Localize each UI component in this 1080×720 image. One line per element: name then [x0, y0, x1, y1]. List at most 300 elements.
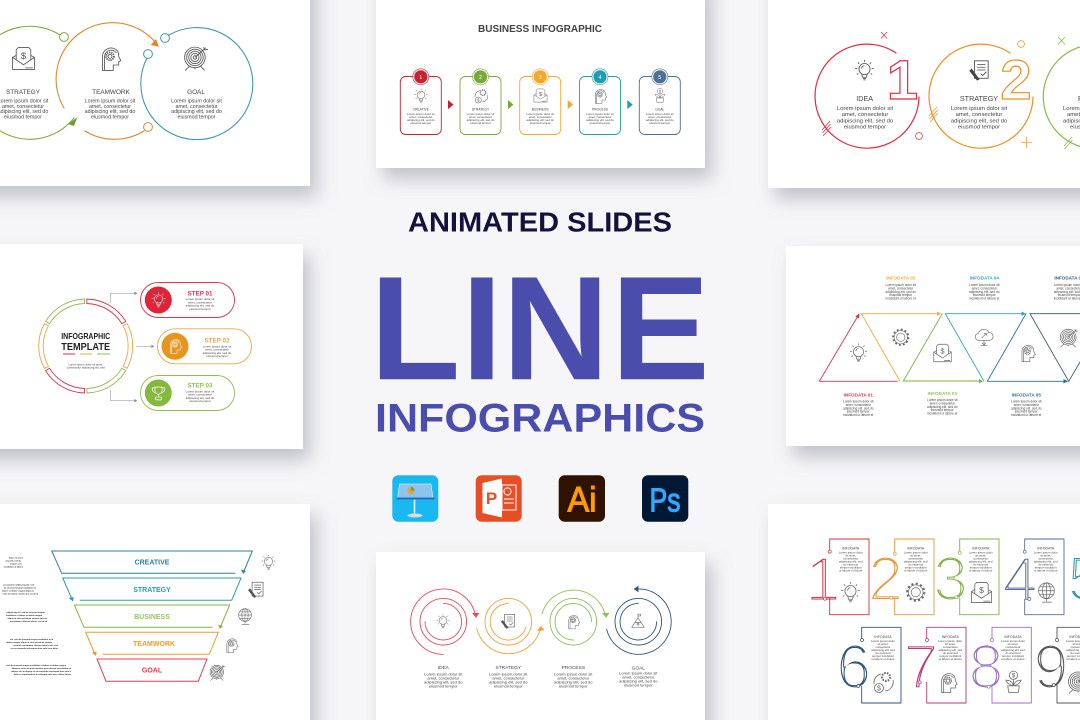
- number card 7: INFODATA: [942, 635, 960, 639]
- panel: numbered circles slide: [768, 0, 1080, 188]
- text: strategy: [489, 665, 528, 688]
- text: infodata 05: Lorem ipsum dolor sit: [1011, 400, 1042, 404]
- icon: envelope: [934, 344, 951, 362]
- card 1 creative: [400, 69, 441, 134]
- card 1 creative: Lorem ipsum dolor sit: [407, 112, 435, 116]
- funnel tier business: BUSINESS: [134, 614, 170, 621]
- text: process: [554, 665, 593, 688]
- card 1 creative: adipiscing elit, sed do: [407, 118, 435, 122]
- orange arc with arrow: [56, 23, 159, 139]
- text: infodata 01: eiusmod tempor: [847, 410, 871, 414]
- text: teamwork: adipiscing elit, sed do: [85, 109, 135, 115]
- number card 6: do eiusmod: [876, 651, 891, 655]
- left text blocks: dolor sit amet,: [9, 556, 23, 560]
- number card 6: INFODATA: [874, 635, 892, 639]
- left text blocks: laboris nisi ut aliquip ex ea commodo consequat duis aute ir: [11, 670, 71, 673]
- number card 1: INFODATA: [842, 546, 860, 550]
- funnel tier goal: [97, 659, 207, 681]
- left text blocks: sed do eiusmod tempor incididunt ut labore et dolore magna: [6, 664, 67, 667]
- text: goal: eiusmod tempor: [178, 114, 216, 120]
- card 5 goal: 5: [658, 75, 661, 81]
- number card 3: sit amet,: [975, 554, 986, 558]
- text: infodata 04: adipiscing elit, sed do: [969, 290, 1000, 294]
- icon: document: [501, 614, 515, 628]
- text: infodata 04: INFODATA 04: [970, 276, 999, 280]
- pill: step 02: eiusmod tempor: [206, 354, 228, 358]
- text: goal: amet, consectetur: [622, 674, 655, 680]
- text: infodata 01: adipiscing elit, sed do: [843, 406, 874, 410]
- number card 4: tempor incididunt: [1035, 566, 1057, 570]
- number card 7: tempor incididunt: [939, 654, 962, 658]
- number card 8: do eiusmod: [1006, 651, 1021, 655]
- number card 3: tempor incididunt: [970, 566, 992, 570]
- triangle 2 orange: [861, 314, 938, 381]
- pill: step 03: adipiscing elit, sed do: [186, 396, 215, 400]
- text: strategy: adipiscing elit, sed do: [951, 118, 1008, 124]
- title: line: LINE: [370, 246, 710, 411]
- card 4 process: [580, 69, 620, 134]
- number card 1: 1: [806, 546, 840, 614]
- number card 6: ut labore et dolore: [871, 657, 895, 661]
- arrow 2: [508, 100, 513, 109]
- number card 7: [904, 627, 966, 703]
- number card 1: Lorem ipsum dolor: [839, 550, 863, 554]
- number card 6: consectetur: [876, 645, 891, 649]
- pill: step 01: [140, 282, 234, 318]
- text: goal: adipiscing elit, sed do: [171, 109, 222, 115]
- text: infodata 02: Lorem ipsum dolor sit: [885, 283, 916, 287]
- card 3 business: amet, consectetur: [529, 115, 552, 119]
- center title: Lorem ipsum dolor sit amet,: [68, 363, 103, 367]
- text: teamwork: amet, consectetur: [89, 104, 131, 110]
- card 4 process: amet, consectetur: [589, 115, 612, 119]
- number card 2: 2: [868, 545, 903, 614]
- center title: consectetur adipiscing elit, sed: [67, 366, 105, 370]
- text: goal: GOAL: [632, 666, 645, 672]
- number card 3: ut labore et dolore: [969, 568, 993, 572]
- number card 2: Lorem ipsum dolor: [904, 550, 928, 554]
- number card 3: [933, 539, 999, 615]
- card 4 process: PROCESS: [592, 108, 609, 112]
- number card 8: INFODATA: [1004, 635, 1022, 639]
- spiral blue: [607, 586, 671, 654]
- icon: cloud: [975, 329, 993, 346]
- connector arrows: [110, 292, 154, 402]
- number card 8: Lorem ipsum dolor: [1001, 639, 1025, 643]
- number card 1: sit amet,: [845, 554, 856, 558]
- number card 2: sit amet,: [910, 554, 921, 558]
- number card 8: ut labore et dolore: [1001, 657, 1025, 661]
- text: idea: Lorem ipsum dolor sit: [837, 106, 894, 112]
- left text blocks: [2, 556, 72, 676]
- text: strategy: adipiscing elit, sed do: [489, 679, 528, 684]
- text: teamwork: [85, 89, 136, 120]
- number card 7: Lorem ipsum dolor: [938, 639, 962, 643]
- text: infodata 01: INFODATA 01: [844, 393, 873, 398]
- left text blocks: incididunt ut labore et dolore magna: [6, 614, 43, 617]
- number card 3: adipiscing elit, sed: [969, 560, 993, 564]
- text: strategy: [0, 89, 49, 120]
- left text blocks: dolor in reprehenderit in voluptate velit esse cillum dolore: [14, 673, 72, 676]
- text: infodata 05: INFODATA 05: [1012, 393, 1041, 398]
- card 2 strategy: eiusmod tempor: [470, 121, 491, 125]
- text: infodata 02: adipiscing elit, sed do: [885, 290, 916, 294]
- funnel tier strategy: [63, 578, 241, 602]
- text: idea: [424, 665, 463, 688]
- triangle arrowheads: [855, 312, 1068, 384]
- left text blocks: enim ad minim veniam quis nostrud: [3, 592, 39, 596]
- pill: step 03: Lorem ipsum dolor sit: [186, 389, 214, 393]
- text: infodata 05: incididunt ut labore et: [1011, 413, 1042, 417]
- center title: TEMPLATE: [61, 342, 110, 353]
- text: infodata 01: amet, consectetur: [846, 403, 872, 407]
- number card 6: [837, 627, 901, 703]
- icon: globe: [239, 609, 251, 624]
- icon: powerpoint: P: [486, 489, 497, 508]
- green arc with arrow: [0, 26, 77, 139]
- icon: illustrator: [559, 475, 605, 522]
- icon: keynote: [392, 475, 438, 522]
- icon: head: [1022, 345, 1035, 362]
- text: strategy: eiusmod tempor: [494, 683, 523, 688]
- number card 4: [1003, 539, 1064, 615]
- panel: circular strategy teamwork goal slide: [0, 0, 310, 186]
- pill: step 02: amet, consectetur: [205, 348, 229, 352]
- text: strategy: eiusmod tempor: [4, 114, 42, 120]
- text: goal: GOAL: [187, 89, 205, 96]
- card 2 strategy: Lorem ipsum dolor sit: [467, 112, 495, 116]
- number card 8: 8: [969, 633, 1003, 702]
- text: strategy: Lorem ipsum dolor sit: [489, 671, 528, 676]
- text: goal: eiusmod tempor: [624, 682, 653, 688]
- number card 1: ut labore et dolore: [839, 568, 863, 572]
- text: infodata 03: incididunt ut labore et: [927, 412, 958, 416]
- text: infodata 05: adipiscing elit, sed do: [1011, 406, 1042, 410]
- card 3 business: eiusmod tempor: [530, 121, 551, 125]
- panel: spiral circles slide: [376, 552, 705, 720]
- number card 9: [1034, 627, 1080, 703]
- text: idea: amet, consectetur: [427, 675, 460, 680]
- card 5 goal: GOAL: [655, 108, 665, 112]
- panel: big numbers slide: [768, 504, 1080, 720]
- card 5 goal: eiusmod tempor: [649, 121, 670, 125]
- triangle 3 green: [903, 314, 980, 381]
- number card 7: 7: [904, 633, 938, 702]
- left text blocks: do eiusmod tempor incididunt ut: [4, 586, 36, 590]
- red circle 1: 1: [887, 48, 918, 111]
- icon: strategy document: [970, 61, 988, 80]
- text: infodata 03: Lorem ipsum dolor sit: [927, 398, 958, 402]
- left text blocks: elit, sed do eiusmod tempor incididunt ut la: [10, 638, 54, 641]
- heading: BUSINESS INFOGRAPHIC: [478, 23, 602, 35]
- text: infodata 04: incididunt ut labore et: [969, 297, 1000, 301]
- card 2 strategy: adipiscing elit, sed do: [467, 118, 495, 122]
- arrow 4: [627, 100, 633, 109]
- card 3 business: BUSINESS: [532, 108, 549, 112]
- number card 4: Lorem ipsum dolor: [1034, 550, 1058, 554]
- text: idea: adipiscing elit, sed do: [837, 118, 894, 124]
- card 3 business: 3: [539, 75, 542, 81]
- left text blocks: exercitation ullamco laboris nisi ut ali: [10, 620, 47, 623]
- text: infodata 02: amet, consectetur: [888, 286, 914, 290]
- text: goal: Lorem ipsum dolor sit: [171, 98, 222, 104]
- text: infodata 02: incididunt ut labore et: [886, 297, 916, 301]
- text: strategy: Lorem ipsum dolor sit: [951, 106, 1008, 112]
- text: process: adipiscing elit, sed do: [554, 679, 593, 684]
- card 1 creative: eiusmod tempor: [410, 121, 431, 125]
- number card 9: 9: [1034, 633, 1068, 702]
- text: goal: [619, 666, 658, 688]
- card 4 process: 4: [598, 75, 602, 81]
- pill: step 01: adipiscing elit, sed do: [186, 304, 215, 308]
- number card 8: adipiscing elit, sed: [1001, 648, 1025, 652]
- card 2 strategy: amet, consectetur: [469, 115, 492, 119]
- pill: step 02: Lorem ipsum dolor sit: [203, 344, 232, 348]
- icon: envelope: [13, 48, 34, 69]
- panel: funnel slide: [0, 504, 310, 720]
- number card 3: INFODATA: [972, 546, 990, 550]
- text: infodata 04: Lorem ipsum dolor sit: [969, 283, 1000, 287]
- arrow 1: [448, 100, 453, 109]
- icon: illustrator: Ai: [568, 480, 596, 520]
- text: idea: IDEA: [856, 94, 873, 103]
- text: process: Lorem ipsum dolor sit: [554, 671, 593, 676]
- left text blocks: cing elit, sed do: [5, 560, 22, 562]
- panel: business infographic slide: [376, 0, 705, 168]
- card 5 goal: adipiscing elit, sed do: [646, 118, 674, 122]
- card 1 creative: amet, consectetur: [409, 115, 432, 119]
- funnel tier creative: [52, 551, 252, 574]
- card 3 business: adipiscing elit, sed do: [526, 118, 554, 122]
- pill: step 03: amet, consectetur: [188, 393, 212, 397]
- text: infodata 03: INFODATA 03: [928, 391, 957, 396]
- left text blocks: aliqua ut enim ad minim veniam quis nostrud exercitation ul: [12, 667, 71, 670]
- pill: step 03: eiusmod tempor: [189, 399, 211, 403]
- text: idea: adipiscing elit, sed do: [424, 679, 463, 684]
- pill: step 02: adipiscing elit, sed do: [203, 351, 232, 355]
- text: teamwork: TEAMWORK: [92, 89, 131, 96]
- pill: step 01: Lorem ipsum dolor sit: [186, 297, 214, 301]
- left text blocks: adipiscing elit, sed do eiusmod tempor: [7, 611, 45, 614]
- text: process: eiusmod tempor: [559, 683, 588, 688]
- number card 7: adipiscing elit, sed: [938, 648, 963, 652]
- number card 8: consectetur: [1006, 645, 1021, 649]
- number card 6: Lorem ipsum dolor: [871, 639, 895, 643]
- left text blocks: tempor ut et: [10, 562, 22, 566]
- number card 6: sit amet,: [878, 642, 889, 646]
- left text blocks: nostrud exercitation ullamco laboris nisi ut al: [13, 644, 58, 647]
- center title: INFOGRAPHIC: [61, 331, 110, 341]
- icon: powerpoint: [476, 475, 522, 522]
- number card 2: do eiusmod: [908, 562, 924, 566]
- card 4 process: adipiscing elit, sed do: [586, 118, 614, 122]
- pill: step 01: STEP 01: [187, 290, 213, 297]
- card 3 business: Lorem ipsum dolor sit: [526, 112, 554, 116]
- text: infodata 04: eiusmod tempor: [973, 293, 997, 297]
- text: infodata 02: eiusmod tempor: [889, 293, 913, 297]
- card 5 goal: [639, 69, 680, 134]
- number card 1: [806, 539, 869, 615]
- text: strategy: [951, 94, 1008, 131]
- card 4 process: eiusmod tempor: [590, 121, 610, 125]
- left text blocks: dolore magna aliqua ut enim ad minim veniam: [6, 641, 52, 644]
- icon: bulb: [436, 614, 450, 628]
- pill: step 01: amet, consectetur: [188, 300, 212, 304]
- text: infodata 01: incididunt ut labore et: [843, 413, 874, 417]
- icon: target: [1060, 329, 1078, 347]
- left text blocks: ex ea commodo consequat duis aute irure dolor: [11, 647, 58, 650]
- title: animated slides: ANIMATED SLIDES: [408, 207, 672, 238]
- text: idea: eiusmod tempor: [844, 125, 886, 131]
- text: strategy: STRATEGY: [960, 94, 998, 103]
- number card 1: consectetur: [843, 556, 858, 560]
- number card 3: do eiusmod: [973, 562, 989, 566]
- number card 8: [969, 627, 1031, 703]
- panel: triangles timeline slide: [786, 246, 1080, 446]
- text: infodata 06: eiusmod tempor: [1058, 293, 1080, 297]
- text: strategy: eiusmod tempor: [958, 125, 1000, 131]
- number card 8: sit amet,: [1008, 642, 1019, 646]
- text: goal: amet, consectetur: [175, 104, 218, 110]
- icon: bulb: [262, 555, 275, 569]
- number card 2: tempor incididunt: [905, 566, 927, 570]
- number card 3: consectetur: [973, 556, 988, 560]
- text: idea: IDEA: [438, 665, 450, 671]
- card 5 goal: Lorem ipsum dolor sit: [646, 112, 674, 116]
- pill: step 01: eiusmod tempor: [189, 307, 211, 311]
- triangle 5 blue: [987, 314, 1065, 381]
- text: infodata 01: Lorem ipsum dolor sit: [843, 400, 874, 404]
- text: infodata 04: [969, 276, 1000, 301]
- icon: target: [210, 665, 225, 681]
- funnel tier goal: GOAL: [142, 668, 163, 675]
- arrow 3: [568, 100, 573, 109]
- card 2 strategy: 2: [479, 75, 482, 81]
- pill: step 02: [158, 329, 252, 364]
- teal circle: [141, 28, 253, 140]
- funnel tier business: [74, 605, 230, 629]
- left text blocks: incididunt ut labore: [4, 566, 24, 568]
- title: infographics: INFOGRAPHICS: [375, 397, 705, 441]
- icon: photoshop: [642, 475, 688, 522]
- number card 2: INFODATA: [907, 546, 925, 550]
- text: strategy: amet, consectetur: [956, 112, 1002, 118]
- funnel tier creative: CREATIVE: [135, 560, 170, 567]
- number card 2: [868, 539, 934, 615]
- number card 2: ut labore et dolore: [904, 568, 928, 572]
- number card 4: adipiscing elit, sed: [1034, 560, 1058, 564]
- number card 4: consectetur: [1038, 556, 1053, 560]
- card 3 business: [520, 69, 561, 134]
- number card 6: 6: [837, 633, 871, 702]
- icon: document: [248, 582, 263, 598]
- text: infodata 05: eiusmod tempor: [1015, 410, 1039, 414]
- number card 3: 3: [933, 545, 968, 614]
- card 2 strategy: [460, 69, 501, 134]
- icon: head: [569, 615, 580, 629]
- text: teamwork: Lorem ipsum dolor sit: [85, 98, 136, 104]
- number card 8: tempor incididunt: [1002, 654, 1024, 658]
- text: infodata 03: eiusmod tempor: [931, 408, 955, 412]
- text: process: [1063, 94, 1080, 131]
- triangle 4 teal: [945, 314, 1023, 381]
- icon: gear: [893, 330, 908, 345]
- text: strategy: amet, consectetur: [492, 675, 525, 680]
- text: infodata 03: amet, consectetur: [930, 401, 956, 405]
- card 2 strategy: STRATEGY: [472, 108, 490, 112]
- icon: bulb: [850, 343, 867, 362]
- card 1 creative: 1: [419, 75, 422, 81]
- triangle 6 dark: [1030, 314, 1080, 381]
- pill: step 02: STEP 02: [204, 338, 230, 345]
- text: idea: Lorem ipsum dolor sit: [424, 671, 463, 676]
- number card 2: adipiscing elit, sed: [904, 560, 928, 564]
- text: process: PROCESS: [562, 665, 585, 671]
- icon: head: [227, 639, 238, 653]
- center title: [61, 331, 110, 370]
- text: infodata 02: INFODATA 02: [886, 276, 916, 280]
- number card 1: adipiscing elit, sed: [839, 560, 863, 564]
- funnel tier teamwork: TEAMWORK: [133, 641, 175, 648]
- number card 4: 4: [1003, 546, 1037, 614]
- card 1 creative: CREATIVE: [413, 108, 430, 112]
- text: process: amet, consectetur: [557, 675, 590, 680]
- left text blocks: aliqua ut enim ad minim veniam quis no: [8, 617, 48, 620]
- text: infodata 01: [843, 393, 874, 417]
- number card 2: consectetur: [908, 556, 923, 560]
- text: infodata 05: amet, consectetur: [1014, 403, 1040, 407]
- spiral orange: [477, 598, 544, 654]
- number card 6: adipiscing elit, sed: [871, 648, 895, 652]
- text: idea: amet, consectetur: [842, 112, 888, 118]
- number card 1: tempor incididunt: [840, 566, 862, 570]
- spiral red: [411, 589, 478, 654]
- icon: flag triangle: [632, 614, 644, 627]
- pill: step 03: [140, 376, 234, 410]
- text: teamwork: eiusmod tempor: [91, 114, 129, 120]
- spiral green: [542, 590, 608, 645]
- number card 7: ut labore et dolore: [939, 657, 962, 661]
- icon: photoshop: Ps: [650, 483, 680, 520]
- card 4 process: Lorem ipsum dolor sit: [586, 112, 614, 116]
- text: goal: [171, 89, 222, 120]
- triangle 1 red: [819, 315, 897, 381]
- text: idea: eiusmod tempor: [429, 683, 458, 688]
- icon: target: [185, 47, 208, 70]
- text: infodata 06: [1054, 276, 1080, 301]
- number card 4: sit amet,: [1040, 554, 1051, 558]
- orange circle 2: [929, 41, 1033, 148]
- funnel tier teamwork: [86, 632, 218, 656]
- orange circle 2: 2: [1000, 48, 1032, 111]
- text: infodata 03: adipiscing elit, sed do: [927, 405, 958, 409]
- panel: infographic template steps slide: [0, 244, 303, 449]
- number card 4: ut labore et dolore: [1034, 568, 1058, 572]
- card 5 goal: amet, consectetur: [648, 115, 671, 119]
- number card 4: do eiusmod: [1038, 562, 1054, 566]
- number card 4: INFODATA: [1037, 546, 1055, 550]
- number card 3: Lorem ipsum dolor: [969, 550, 993, 554]
- text: infodata 03: [927, 391, 958, 416]
- text: idea: [837, 94, 894, 131]
- left text blocks: consectetur adipiscing elit, sed: [3, 584, 35, 586]
- number card 1: do eiusmod: [843, 562, 859, 566]
- text: strategy: STRATEGY: [6, 89, 41, 96]
- text: strategy: STRATEGY: [496, 665, 522, 671]
- number card 7: sit amet,: [945, 642, 956, 646]
- text: infodata 05: [1011, 393, 1042, 417]
- text: infodata 04: amet, consectetur: [972, 286, 998, 290]
